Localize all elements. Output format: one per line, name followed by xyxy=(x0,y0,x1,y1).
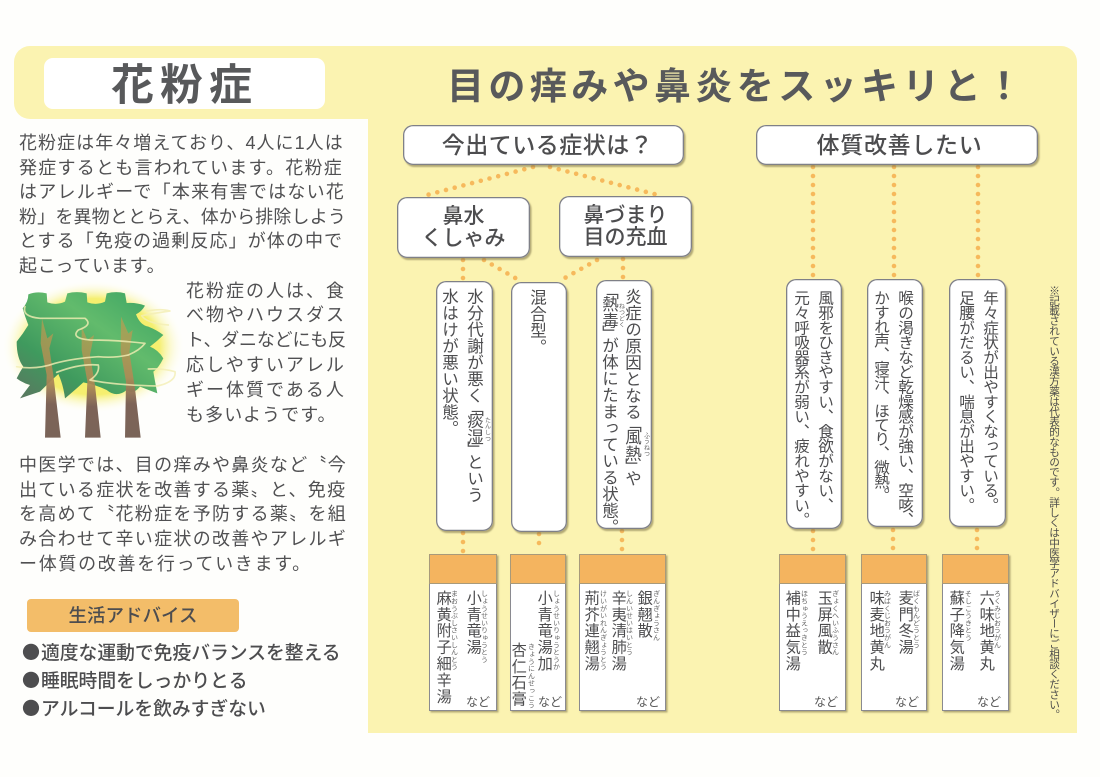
advice heading: 生活アドバイス xyxy=(69,605,197,626)
allergy text block: 花粉症の人は、食 xyxy=(186,281,346,301)
constitution card 2 xyxy=(867,279,923,527)
intro text block: 花粉症は年々増えており、4人に1人は xyxy=(19,133,344,153)
intro text block: とする「免疫の過剰反応」が体の中で xyxy=(19,231,343,251)
title box xyxy=(44,58,325,109)
allergy text block xyxy=(186,281,346,425)
formula card 3: 辛夷清肺湯 xyxy=(609,590,626,672)
advice heading xyxy=(27,599,239,632)
formula card 2: しょうせいりゅうとうか xyxy=(552,590,560,670)
formula card 2: きょうにんせっこう xyxy=(528,643,534,709)
formula card 3: 荊芥連翹湯 xyxy=(582,590,599,672)
formula card 6: ろくみじおうがん xyxy=(994,590,1000,648)
formula card 3: 銀翹散 xyxy=(635,590,652,639)
formula card 6: そしこうきとう xyxy=(964,590,972,641)
traditional medicine text block: み合わせて辛い症状の改善やアレルギ xyxy=(19,529,347,549)
traditional medicine text block: を高めて〝花粉症を予防する薬〟を組 xyxy=(19,504,347,524)
yellow header band xyxy=(14,46,1077,119)
constitution card 2: かすれ声、寝汗、ほてり、微熱。 xyxy=(872,290,889,502)
intro text block: 起こっています。 xyxy=(19,256,165,276)
constitution card 3: 年々症状が出やすくなっている。 xyxy=(981,290,998,512)
allergy text block: べ物やハウスダス xyxy=(186,305,346,325)
symptom card 3: 炎症の原因となる「風熱」や xyxy=(622,288,640,486)
yellow main panel xyxy=(368,100,1077,733)
formula card 4 xyxy=(779,554,846,711)
symptom card 3: 「熱毒」が体にたまっている状態。 xyxy=(600,283,618,535)
advice list: ● xyxy=(22,639,40,665)
icon: cedar trees with pollen xyxy=(8,284,178,438)
formula card 2: など xyxy=(538,695,562,709)
formula card 3: ぎんぎょうさん xyxy=(652,590,660,641)
symptom card 2: 混合型。 xyxy=(528,289,546,355)
box: runny nose, sneezing: くしゃみ xyxy=(422,227,506,250)
formula card 5 xyxy=(861,554,927,711)
box: stuffy nose, red eyes: 目の充血 xyxy=(584,226,668,249)
formula card 1 xyxy=(429,554,497,711)
symptom card 2 xyxy=(511,282,567,532)
constitution card 1: 風邪をひきやすい、食欲がない、 xyxy=(816,290,833,512)
formula card 6 xyxy=(942,554,1009,711)
constitution card 2: 喉の渇きなど乾燥感が強い、空咳、 xyxy=(896,290,913,527)
constitution card 1 xyxy=(786,279,842,529)
intro text block: 発症するとも言われています。花粉症 xyxy=(19,158,343,178)
formula card 2: 小青竜湯加 xyxy=(535,590,552,672)
formula card 3: など xyxy=(636,695,660,709)
formula card 6: 蘇子降気湯 xyxy=(947,590,964,672)
intro text block: はアレルギーで「本来有害ではない花 xyxy=(19,182,345,202)
allergy text block: ギー体質である人 xyxy=(186,380,346,400)
formula card 1: 麻黄附子細辛湯 xyxy=(434,590,451,705)
formula card 2: 杏仁石膏 xyxy=(509,642,526,708)
allergy text block: も多いようです。 xyxy=(186,405,337,425)
box: current symptoms xyxy=(403,125,684,165)
formula card 1: しょうせいりゅうとう xyxy=(480,590,488,663)
formula card 6: など xyxy=(977,695,1001,709)
formula card 4: ぎょくへいふうさん xyxy=(832,590,838,656)
title: 花粉症 xyxy=(111,62,258,110)
formula card 3: けいがいれんぎょうとう xyxy=(600,590,606,670)
formula card 3: しんいせいはいとう xyxy=(626,590,632,656)
symptom card 3 xyxy=(596,280,652,529)
constitution card 3 xyxy=(949,279,1006,527)
box: stuffy nose, red eyes: 鼻づまり xyxy=(584,204,668,227)
traditional medicine text block xyxy=(19,455,347,574)
formula card 5: ばくもんどうとう xyxy=(912,590,920,648)
formula card 1: 小青竜湯 xyxy=(464,590,481,656)
traditional medicine text block: ー体質の改善を行っていきます。 xyxy=(19,554,312,574)
traditional medicine text block: 出ている症状を改善する薬〟と、免疫 xyxy=(19,480,346,500)
formula card 6: 六味地黄丸 xyxy=(977,590,994,672)
allergy text block: 応しやすいアレル xyxy=(186,355,346,375)
allergy text block: ト、ダニなどにも反 xyxy=(186,330,346,350)
symptom card 1: 水分代謝が悪く「痰湿」という xyxy=(464,288,482,503)
symptom card 1: たんしつ xyxy=(484,417,490,442)
symptom card 1: 水はけが悪い状態。 xyxy=(440,288,458,436)
formula card 2 xyxy=(510,554,566,711)
formula card 5: 麦門冬湯 xyxy=(896,590,913,656)
symptom card 3: ねつどく xyxy=(618,303,624,328)
box: stuffy nose, red eyes xyxy=(559,196,692,257)
traditional medicine text block: 中医学では、目の痒みや鼻炎など〝今 xyxy=(19,455,347,475)
formula card 5: 味麦地黄丸 xyxy=(867,590,884,672)
advice list: 睡眠時間をしっかりとる xyxy=(41,670,248,691)
formula card 4: 補中益気湯 xyxy=(783,590,800,672)
box: current symptoms: 今出ている症状は？ xyxy=(442,132,653,158)
constitution card 3: 足腰がだるい、喘息が出やすい。 xyxy=(957,290,974,512)
formula card 5: など xyxy=(895,695,919,709)
formula card 4: など xyxy=(814,695,838,709)
constitution card 1: 元々呼吸器系が弱い、疲れやすい。 xyxy=(792,290,809,527)
box: runny nose, sneezing: 鼻水 xyxy=(442,205,484,228)
box: constitution improvement: 体質改善したい xyxy=(817,132,982,158)
formula card 4: 玉屏風散 xyxy=(815,590,832,656)
advice list: ● xyxy=(22,667,40,693)
symptom card 3: ふうねつ xyxy=(642,432,648,457)
box: runny nose, sneezing xyxy=(397,197,530,258)
formula card 1: など xyxy=(466,695,490,709)
note: ※記載されている漢方薬は代表的なものです。詳しくは中医学アドバイザーにご相談ください。 xyxy=(1048,285,1060,719)
formula card 3 xyxy=(579,554,666,711)
formula card 5: みばくじおうがん xyxy=(884,590,890,648)
formula card 1: まおうぶしさいしんとう xyxy=(450,590,458,670)
advice list: アルコールを飲みすぎない xyxy=(41,698,266,719)
intro text block: 粉」を異物ととらえ、体から排除しよう xyxy=(19,207,346,227)
advice list xyxy=(22,639,341,721)
advice list: 適度な運動で免疫バランスを整える xyxy=(41,642,341,663)
formula card 4: ほちゅうえっきとう xyxy=(800,590,808,656)
symptom card 1 xyxy=(436,281,493,531)
advice list: ● xyxy=(22,695,40,721)
box: constitution improvement xyxy=(756,125,1038,165)
headline: 目の痒みや鼻炎をスッキリと！ xyxy=(447,66,1027,107)
intro text block xyxy=(19,133,346,276)
